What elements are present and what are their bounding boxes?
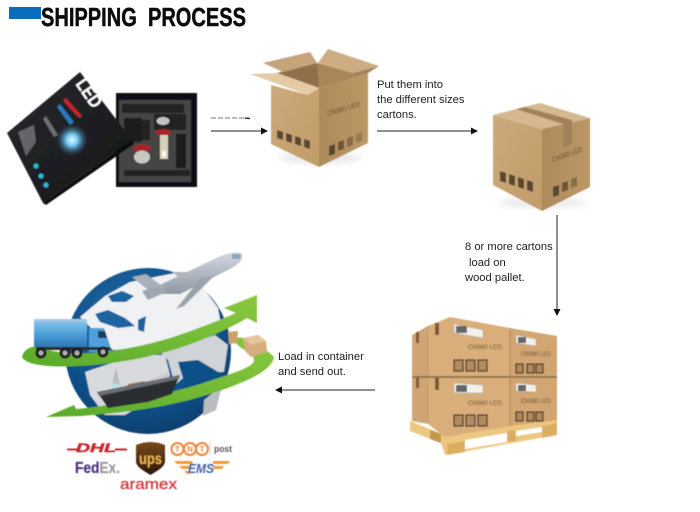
logo: TNT post: N [187,445,193,454]
text: put them into cartons: the different sizes [377,94,465,106]
truck [34,319,110,358]
upper green arrow [22,295,257,366]
logo: DHL [67,441,127,455]
box lid: LED [71,75,106,112]
logo: TNT post [172,442,232,455]
printed brand names: CN360 LED [521,398,551,405]
text: put them into cartons: Put them into [377,79,443,91]
logo: UPS shield [136,442,165,475]
arrow: sealed carton to pallet [554,215,560,316]
globe with transport [22,252,274,434]
pallet carton handling icons [454,360,543,426]
arrow: pallet to globe [275,386,375,394]
open carton [250,49,379,167]
wood pallet [410,418,557,455]
box lid [7,72,134,205]
arrow: box to open carton [211,128,268,134]
logo: UPS shield: ups [139,451,162,468]
text: put them into cartons: cartons. [377,109,417,121]
logo: TNT post: T [175,445,180,454]
printed brand names: CN360 LED [521,351,551,358]
printed brand names [468,344,551,407]
text: load on wood pallet: wood pallet. [464,272,525,284]
lower green arrow [46,338,274,417]
logo: EMS [174,461,230,476]
barcode labels [454,324,536,393]
title: SHIPPING PROCESS [41,2,246,32]
open carton: CN360 LED [327,101,361,118]
text: load in container: Load in container [278,351,364,363]
text: load on wood pallet: 8 or more cartons [465,241,553,253]
title [9,2,246,32]
handling icons [500,171,577,197]
courier logos [67,441,232,493]
printed brand names: CN360 LED [468,400,502,407]
text: load in container [278,351,364,378]
globe [65,268,231,434]
logo: aramex: aramex [120,476,178,493]
sealed carton: CN360 LED [551,146,584,164]
faint label above first arrow [211,117,250,120]
printed brand names: CN360 LED [468,344,502,351]
palletised cartons [410,317,557,455]
LED product box and foam tray [7,72,197,205]
text: put them into cartons [377,79,465,121]
logo: TNT post: T [200,445,205,454]
text: load on wood pallet [464,241,553,284]
small parcels [228,331,267,357]
arrow: open carton to sealed carton [377,128,478,134]
text: load on wood pallet: load on [469,257,506,269]
tapes [416,323,439,390]
handling icons [277,130,362,156]
sealed carton [493,103,590,211]
logo: DHL: DHL [76,441,116,455]
headlight bulbs [133,117,171,164]
left stack side [412,326,428,424]
airplane [132,252,243,309]
text: load in container: and send out. [278,366,346,378]
carton flaps [250,49,379,95]
logo: FedEx: FedEx. [75,460,120,477]
logo: TNT post: post [214,444,232,454]
main stack [428,317,510,437]
foam tray [116,93,197,187]
logo: EMS: EMS [188,461,214,476]
ship [97,368,180,408]
